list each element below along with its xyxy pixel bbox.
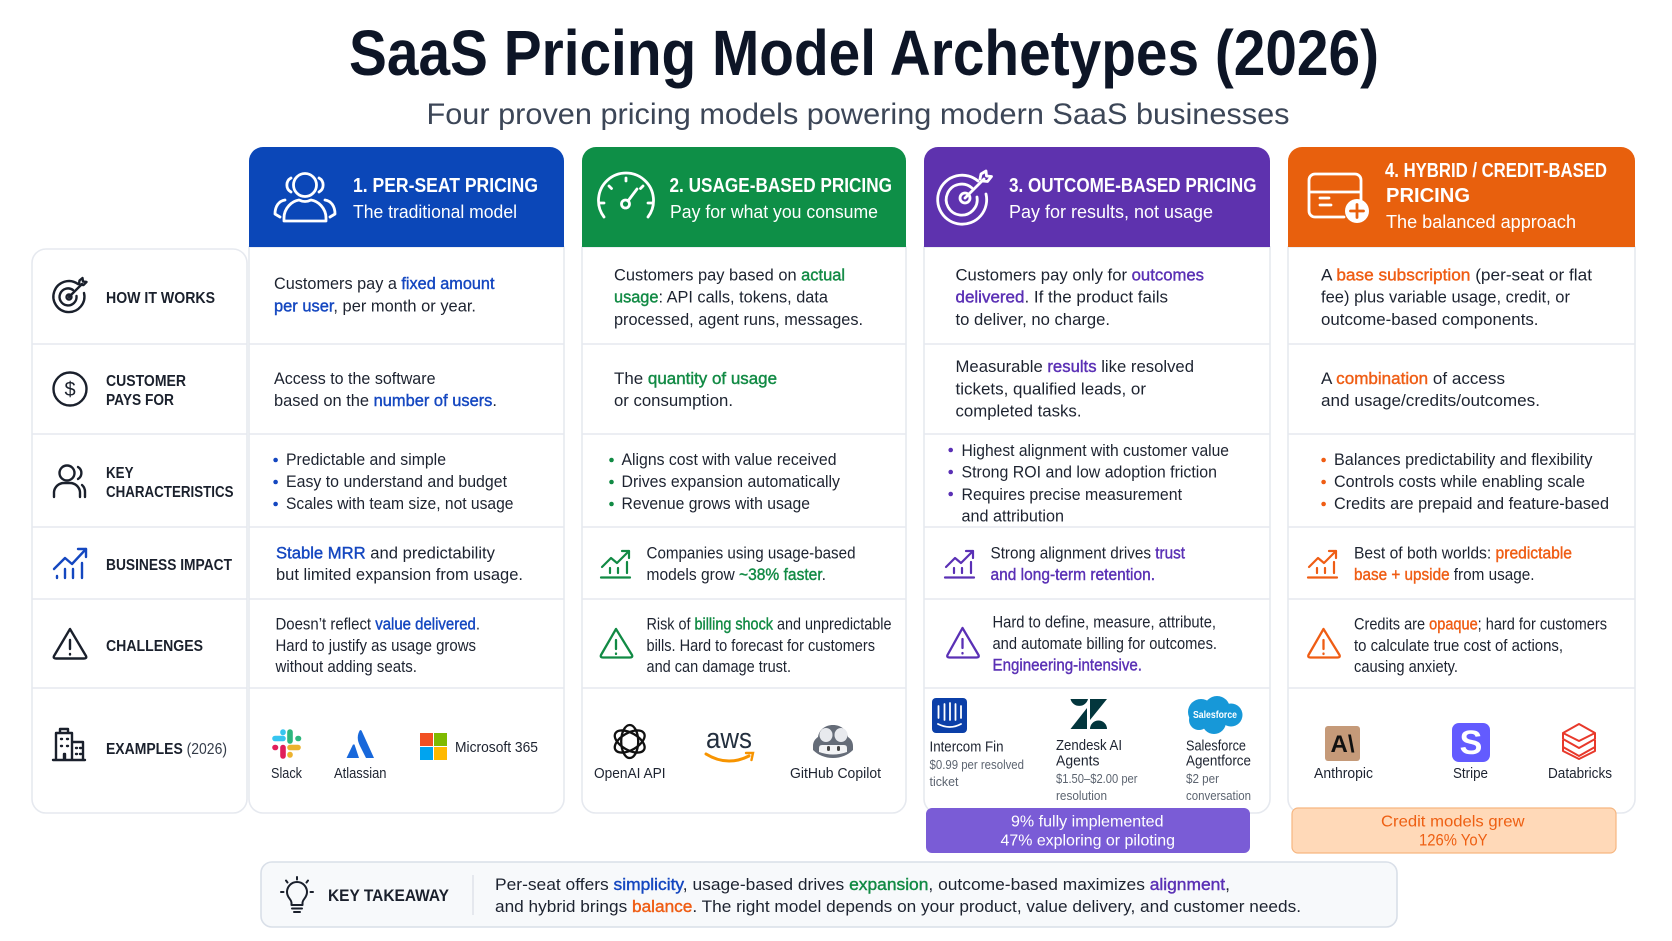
example: salesforce: Salesforce — [1186, 738, 1246, 754]
key characteristics list: Scales with team size, not usage — [286, 495, 514, 513]
key characteristics list: Controls costs while enabling scale — [1334, 473, 1585, 491]
key characteristics list: Easy to understand and budget — [286, 473, 507, 491]
key characteristics list: Aligns cost with value received — [622, 451, 836, 469]
row label: customer pays for: CUSTOMER — [106, 373, 186, 390]
key characteristics list: Predictable and simple — [286, 451, 446, 469]
row label: challenges: CHALLENGES — [106, 638, 203, 655]
how it works text: processed, agent runs, messages. — [614, 311, 863, 329]
challenges text: Hard to justify as usage grows — [276, 637, 476, 655]
example: zendesk — [1056, 699, 1138, 803]
example: salesforce: $2 per — [1186, 772, 1219, 786]
example: intercom fin: $0.99 per resolved — [930, 758, 1024, 772]
row label: customer pays for: $ — [64, 379, 76, 401]
header: hybrid: The balanced approach — [1386, 212, 1576, 232]
customer pays for text: A combination of access — [1321, 370, 1505, 388]
example: atlassian: Atlassian — [334, 766, 386, 782]
example: microsoft 365 — [420, 733, 538, 760]
panel: key takeaway: Per-seat offers simplicity, usage-based drives expansion, outcome-based maximizes alignment, — [495, 876, 1230, 894]
key characteristics list: Credits are prepaid and feature-based — [1334, 495, 1609, 513]
customer pays for text: or consumption. — [614, 392, 733, 410]
business impact: and long-term retention. — [990, 566, 1155, 584]
key characteristics list: Strong ROI and low adoption friction — [962, 464, 1217, 482]
example: zendesk: $1.50–$2.00 per — [1056, 772, 1138, 786]
how it works text: outcome-based components. — [1321, 311, 1538, 329]
row label: how it works: HOW IT WORKS — [106, 290, 215, 307]
subtitle: Four proven pricing models powering modern SaaS businesses — [426, 98, 1290, 131]
example: zendesk: resolution — [1056, 789, 1107, 803]
icon: light bulb — [281, 877, 313, 912]
callout: adoption stat: 9% fully implemented — [1011, 814, 1164, 830]
key characteristics list — [609, 451, 841, 513]
row label: business impact — [54, 549, 232, 578]
example: zendesk: Agents — [1056, 754, 1100, 770]
example: atlassian — [334, 730, 386, 782]
key characteristics list: Requires precise measurement — [962, 486, 1182, 504]
example: salesforce: conversation — [1186, 789, 1251, 803]
row label: customer pays for — [54, 372, 186, 409]
callout: credit growth stat: 126% YoY — [1419, 830, 1488, 850]
customer pays for text — [956, 358, 1194, 420]
challenges text — [275, 616, 480, 676]
key characteristics list — [1321, 451, 1609, 513]
challenges: causing anxiety. — [1354, 658, 1458, 676]
example: intercom fin: Intercom Fin — [930, 740, 1004, 756]
how it works text: to deliver, no charge. — [956, 311, 1110, 329]
customer pays for text — [614, 370, 777, 410]
example: stripe — [1452, 723, 1490, 782]
business impact — [601, 544, 856, 584]
callout: credit growth stat: Credit models grew — [1381, 814, 1525, 830]
callout: credit growth stat — [1292, 808, 1616, 853]
customer pays for text: completed tasks. — [956, 402, 1082, 420]
header: outcome-based — [924, 147, 1270, 247]
challenges: Engineering-intensive. — [992, 656, 1142, 674]
panel: row labels — [32, 249, 247, 813]
key characteristics list — [948, 442, 1229, 526]
callout: adoption stat — [926, 808, 1250, 853]
panel: key takeaway: KEY TAKEAWAY — [328, 886, 450, 905]
example: salesforce: Agentforce — [1186, 754, 1251, 770]
challenges: and can damage trust. — [646, 658, 791, 676]
example: databricks: Databricks — [1548, 766, 1612, 782]
how it works text — [1321, 266, 1592, 329]
key characteristics list: Highest alignment with customer value — [962, 442, 1229, 460]
row label: examples: EXAMPLES (2026) — [106, 741, 227, 758]
header: per-seat — [249, 147, 564, 247]
callout: adoption stat: 47% exploring or piloting — [1000, 832, 1175, 850]
example: salesforce: Salesforce — [1193, 709, 1237, 721]
challenges: and automate billing for outcomes. — [992, 635, 1217, 653]
example: microsoft 365: Microsoft 365 — [455, 740, 538, 756]
example: stripe: S — [1460, 724, 1482, 762]
how it works text: Customers pay only for outcomes — [956, 266, 1204, 284]
business impact: models grow ~38% faster. — [646, 566, 826, 584]
customer pays for text: based on the number of users. — [274, 392, 497, 410]
header: hybrid: 4. HYBRID / CREDIT-BASED — [1385, 160, 1607, 182]
challenges text: Doesn’t reflect value delivered. — [276, 616, 480, 634]
key characteristics list: and attribution — [962, 508, 1064, 526]
icon: users — [275, 174, 335, 221]
example: aws: aws — [706, 723, 752, 755]
header: hybrid — [1288, 147, 1635, 247]
title: SaaS Pricing Model Archetypes (2026) — [349, 17, 1379, 89]
example: openai — [594, 725, 666, 782]
business impact text: but limited expansion from usage. — [276, 566, 523, 584]
challenges — [1308, 616, 1607, 676]
business impact: Companies using usage-based — [646, 544, 856, 562]
header: outcome-based: 3. OUTCOME-BASED PRICING — [1009, 175, 1256, 197]
how it works text — [956, 266, 1204, 329]
business impact text: Stable MRR and predictability — [276, 544, 496, 562]
customer pays for text: and usage/credits/outcomes. — [1321, 392, 1540, 410]
how it works text: A base subscription (per-seat or flat — [1321, 266, 1592, 284]
customer pays for text — [1321, 370, 1540, 410]
business impact: Strong alignment drives trust — [990, 544, 1185, 562]
header: usage-based — [582, 147, 906, 247]
business impact text — [276, 544, 523, 584]
example: intercom fin: ticket — [930, 775, 959, 789]
how it works text: delivered. If the product fails — [956, 288, 1168, 306]
how it works text: usage: API calls, tokens, data — [614, 288, 829, 306]
header: outcome-based: Pay for results, not usage — [1009, 202, 1213, 222]
example: intercom fin — [930, 698, 1024, 789]
row label: customer pays for: PAYS FOR — [106, 392, 174, 409]
business impact: base + upside from usage. — [1354, 566, 1534, 584]
example: stripe: Stripe — [1453, 766, 1488, 782]
row label: key characteristics: CHARACTERISTICS — [106, 484, 234, 501]
business impact — [1308, 544, 1572, 584]
how it works text — [274, 275, 495, 316]
panel: key takeaway — [261, 862, 1397, 927]
row label: business impact: BUSINESS IMPACT — [106, 557, 232, 574]
how it works text — [614, 266, 863, 329]
business impact — [945, 544, 1185, 584]
example: anthropic: A\ — [1330, 731, 1355, 758]
row label: how it works — [53, 278, 215, 312]
row label: key characteristics — [54, 465, 234, 501]
icon: credit card plus — [1309, 174, 1369, 223]
example: slack: Slack — [271, 766, 303, 782]
customer pays for text — [274, 370, 497, 410]
example: github copilot — [790, 725, 881, 782]
panel: key takeaway: and hybrid brings balance. The right model depends on your product, value delivery, and customer needs. — [495, 898, 1301, 916]
challenges: bills. Hard to forecast for customers — [646, 637, 875, 655]
panel: outcome-based pricing — [924, 147, 1270, 853]
how it works text: Customers pay based on actual — [614, 266, 845, 284]
panel: usage-based pricing — [582, 147, 906, 813]
row label: key characteristics: KEY — [106, 465, 134, 482]
key characteristics list: Drives expansion automatically — [622, 473, 841, 491]
example: anthropic: Anthropic — [1314, 766, 1373, 782]
challenges — [601, 616, 892, 676]
challenges: Risk of billing shock and unpredictable — [646, 616, 892, 634]
challenges: to calculate true cost of actions, — [1354, 637, 1563, 655]
customer pays for text: tickets, qualified leads, or — [956, 380, 1147, 398]
header: per-seat: The traditional model — [353, 202, 517, 222]
header: usage-based: 2. USAGE-BASED PRICING — [670, 175, 892, 197]
example: github copilot: GitHub Copilot — [790, 766, 881, 782]
example: salesforce — [1186, 696, 1251, 803]
row label: examples — [53, 729, 227, 760]
how it works text: per user, per month or year. — [274, 298, 476, 316]
icon: gauge — [598, 173, 654, 217]
panel: per-seat pricing — [249, 147, 564, 813]
key characteristics list — [273, 451, 514, 513]
example: slack — [271, 732, 303, 782]
key characteristics list: Revenue grows with usage — [622, 495, 810, 513]
challenges: Hard to define, measure, attribute, — [992, 614, 1216, 632]
challenges — [947, 614, 1217, 674]
key characteristics list: Balances predictability and flexibility — [1334, 451, 1593, 469]
example: databricks — [1548, 724, 1612, 782]
challenges text: without adding seats. — [275, 658, 417, 676]
customer pays for text: Access to the software — [274, 370, 436, 388]
example: anthropic — [1314, 726, 1373, 782]
business impact: Best of both worlds: predictable — [1354, 544, 1572, 562]
challenges: Credits are opaque; hard for customers — [1354, 616, 1607, 634]
header: per-seat: 1. PER-SEAT PRICING — [353, 175, 538, 197]
panel: hybrid credit-based pricing — [1288, 147, 1635, 853]
row label: challenges — [54, 629, 203, 658]
example: zendesk: Zendesk AI — [1056, 738, 1122, 754]
how it works text: fee) plus variable usage, credit, or — [1321, 288, 1570, 306]
customer pays for text: The quantity of usage — [614, 370, 777, 388]
how it works text: Customers pay a fixed amount — [274, 275, 495, 293]
example: openai: OpenAI API — [594, 766, 666, 782]
header: usage-based: Pay for what you consume — [670, 202, 878, 222]
header: hybrid: PRICING — [1386, 185, 1470, 207]
customer pays for text: Measurable results like resolved — [956, 358, 1194, 376]
icon: target — [938, 171, 992, 224]
